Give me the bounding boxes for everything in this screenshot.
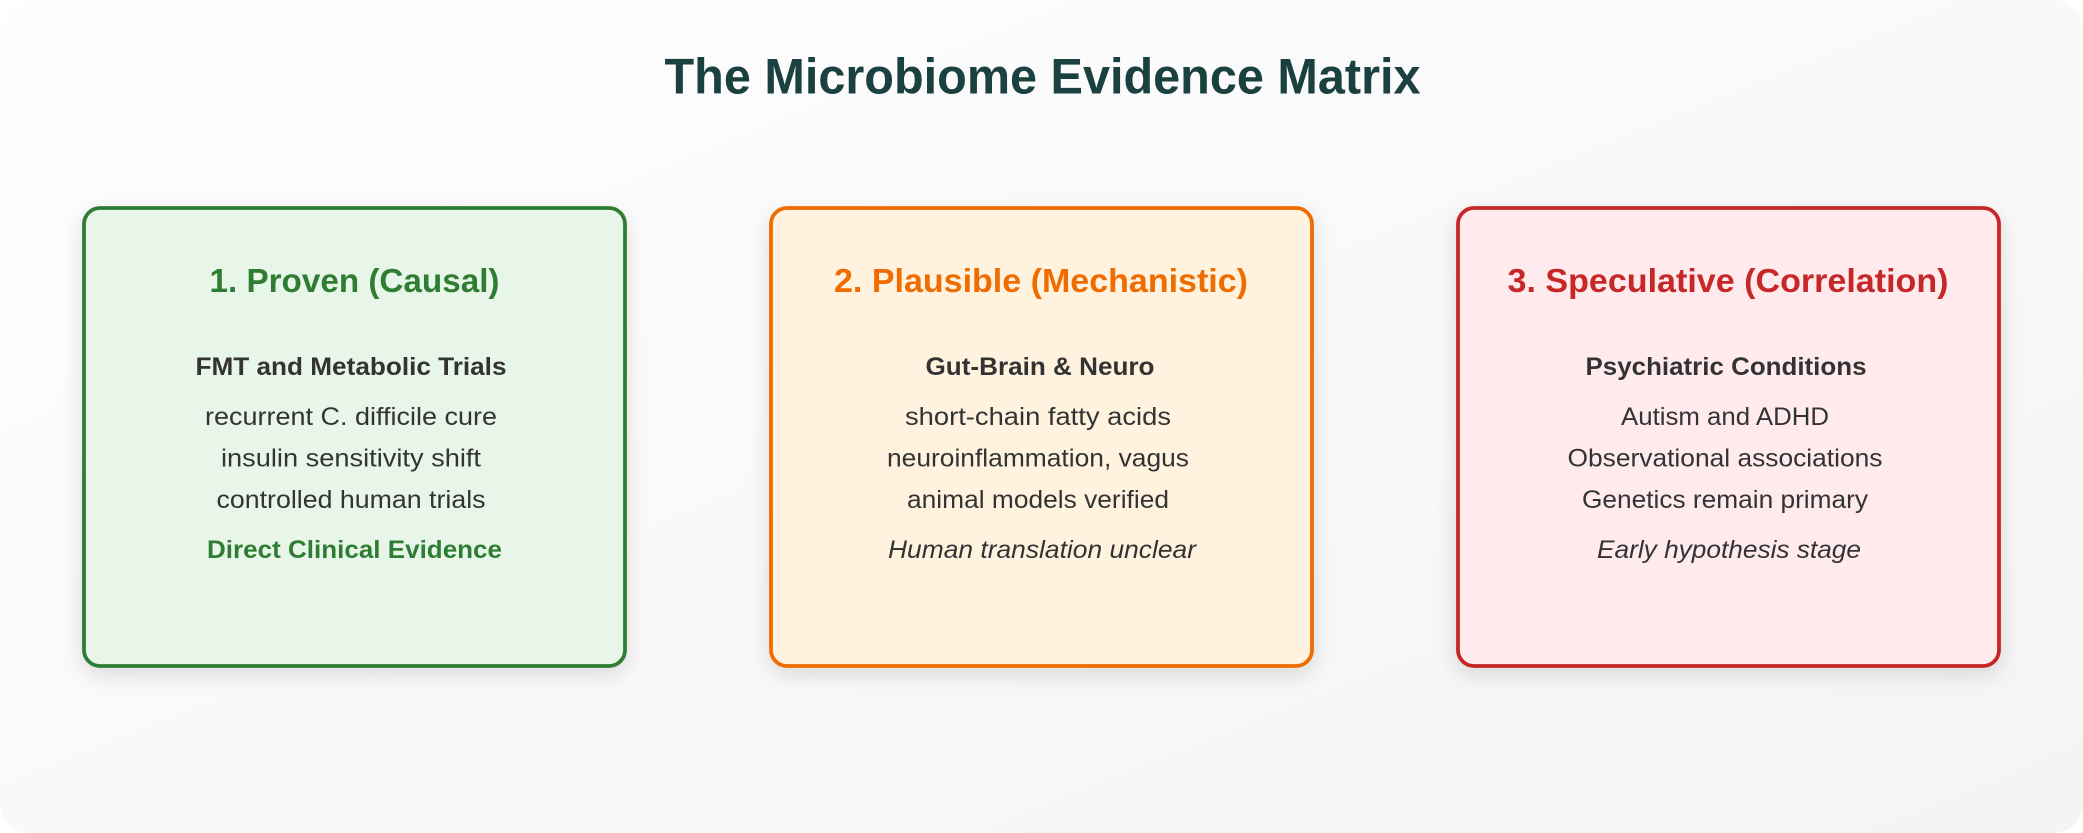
verdict: early hypothesis stage: Early hypothesis stage (1597, 536, 1861, 564)
text: controlled human trials: controlled human trials (216, 486, 486, 514)
panel: speculative (1458, 208, 1999, 666)
panel box: plausible (771, 208, 1312, 666)
text: observational associations: Observational associations (1568, 444, 1882, 472)
verdict: direct clinical evidence: Direct Clinical Evidence (207, 536, 502, 564)
text: animal models verified: animal models verified (907, 486, 1169, 514)
text: autism and ADHD: Autism and ADHD (1621, 403, 1829, 431)
heading: plausible: 2. Plausible (Mechanistic) (834, 263, 1248, 300)
title: The Microbiome Evidence Matrix (664, 48, 1421, 104)
text: recurrent C. difficile cure: recurrent C. difficile cure (205, 403, 497, 431)
panel: plausible (771, 208, 1312, 666)
subheading: Gut-Brain and Neuro: Gut-Brain & Neuro (926, 353, 1154, 381)
text: short-chain fatty acids: short-chain fatty acids (905, 403, 1171, 431)
text: insulin sensitivity shift: insulin sensitivity shift (221, 444, 481, 472)
panel: proven (84, 208, 625, 666)
heading: proven: 1. Proven (Causal) (210, 263, 500, 300)
text: genetics remain primary: Genetics remain primary (1582, 486, 1869, 514)
subheading: FMT and Metabolic Trials: FMT and Metabolic Trials (196, 353, 507, 381)
panel box: speculative (1458, 208, 1999, 666)
text: neuroinflammation, vagus: neuroinflammation, vagus (887, 444, 1189, 472)
verdict: human translation unclear: Human translation unclear (888, 536, 1198, 564)
panel box: proven (84, 208, 625, 666)
heading: speculative: 3. Speculative (Correlation) (1508, 263, 1948, 300)
subheading: Psychiatric Conditions: Psychiatric Conditions (1586, 353, 1866, 381)
